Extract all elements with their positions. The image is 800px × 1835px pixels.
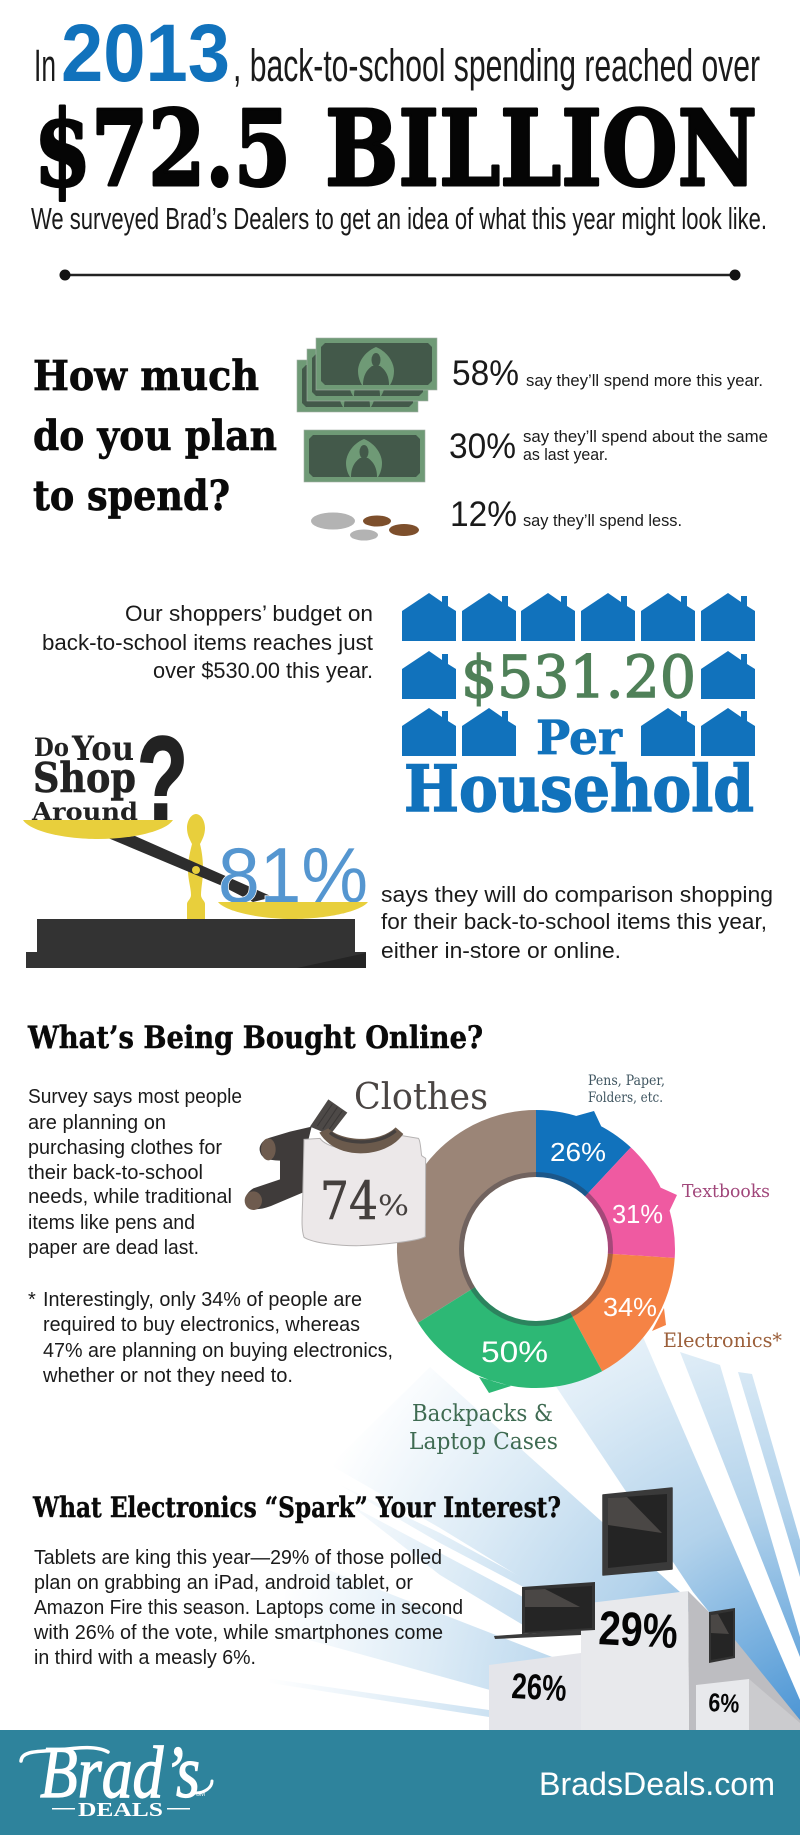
- stat: 6 percent: 6%: [708, 1687, 740, 1719]
- heading: do you shop around: Do: [34, 733, 69, 762]
- houses grid: [402, 593, 755, 756]
- survey paragraph: their back-to-school: [28, 1162, 203, 1184]
- stat: 81 percent: 81%: [218, 831, 368, 919]
- heading: how much do you plan to spend: do you plan: [33, 412, 277, 460]
- budget text: [42, 601, 373, 683]
- background light rays: [265, 1330, 800, 1725]
- stat: 30 percent: 30%: [449, 427, 516, 466]
- label: Per: Per: [536, 711, 623, 766]
- survey paragraph: needs, while traditional: [28, 1186, 232, 1208]
- heading: do you shop around: ?: [137, 712, 188, 846]
- stat: 58 percent: [452, 354, 763, 393]
- segment: pens paper folders: [536, 1110, 631, 1197]
- icon: coins: [311, 512, 419, 540]
- label: textbooks: Textbooks: [682, 1181, 770, 1202]
- electronics footnote: required to buy electronics, whereas: [43, 1314, 360, 1336]
- comparison shopping text: either in-store or online.: [381, 938, 621, 963]
- icon: stack of bills: [297, 338, 437, 412]
- heading: do you shop around: You: [71, 729, 134, 769]
- survey paragraph: [28, 1086, 242, 1259]
- headline: $72.5 BILLION: [34, 87, 757, 210]
- stat: 26 percent: 26%: [511, 1665, 568, 1709]
- footer band: [0, 1730, 800, 1835]
- electronics footnote: [28, 1289, 393, 1387]
- donut value 31%: 31%: [612, 1199, 663, 1229]
- electronics footnote: *: [28, 1289, 36, 1311]
- icon: laptop: [494, 1582, 595, 1639]
- stat: 58 percent: 58%: [452, 354, 519, 393]
- stat: 12 percent: say they’ll spend less.: [523, 511, 682, 530]
- icon: podium: [489, 1591, 800, 1730]
- stat: 74 percent: %: [378, 1189, 409, 1222]
- budget text: Our shoppers’ budget on: [125, 601, 373, 626]
- segment: textbooks: [584, 1147, 677, 1258]
- heading: do you shop around: [31, 712, 188, 846]
- segment: backpacks: [418, 1287, 602, 1393]
- stat: 30 percent: as last year.: [523, 445, 608, 464]
- label: backpacks and laptop cases: [409, 1401, 558, 1455]
- segment: clothes: [397, 1110, 536, 1323]
- service mark: SM: [196, 1792, 205, 1798]
- electronics paragraph: in third with a measly 6%.: [34, 1647, 256, 1669]
- electronics paragraph: Amazon Fire this season. Laptops come in second: [34, 1597, 463, 1619]
- electronics footnote: Interestingly, only 34% of people are: [43, 1289, 362, 1311]
- electronics paragraph: plan on grabbing an iPad, android tablet, or: [34, 1572, 413, 1594]
- survey paragraph: purchasing clothes for: [28, 1137, 222, 1159]
- icon: balance scale: [23, 814, 366, 968]
- heading: what's being bought online: What’s Being Bought Online?: [27, 1020, 483, 1056]
- heading: how much do you plan to spend: [33, 352, 277, 520]
- title line: In 2013: [34, 8, 760, 99]
- donut value 34%: 34%: [603, 1292, 657, 1322]
- label: backpacks and laptop cases: Backpacks &: [412, 1401, 553, 1427]
- icon: socks: [245, 1099, 347, 1210]
- budget text: back-to-school items reaches just: [42, 630, 373, 655]
- electronics paragraph: with 26% of the vote, while smartphones come: [33, 1622, 443, 1644]
- headline: $72.5 BILLION: $72.5: [34, 87, 291, 210]
- title line: In 2013: In: [34, 40, 56, 91]
- stat: 12 percent: [450, 495, 682, 534]
- electronics footnote: 47% are planning on buying electronics,: [43, 1340, 393, 1362]
- scale right pan: [218, 902, 368, 919]
- label: pens paper folders: [588, 1073, 665, 1106]
- donut chart: [397, 1110, 677, 1393]
- electronics paragraph: [33, 1547, 463, 1669]
- label: backpacks and laptop cases: Laptop Cases: [409, 1429, 558, 1455]
- icon: tablet: [603, 1488, 672, 1575]
- donut value 26%: 26%: [550, 1137, 606, 1167]
- stat: 74 percent: 74: [320, 1172, 378, 1232]
- icon: smartphone: [709, 1608, 735, 1663]
- website url: BradsDeals.com: [539, 1766, 775, 1802]
- heading: do you shop around: Around: [31, 797, 138, 826]
- comparison shopping text: [381, 882, 773, 963]
- label: pens paper folders: Pens, Paper,: [588, 1073, 665, 1089]
- survey paragraph: are planning on: [28, 1112, 166, 1134]
- heading: how much do you plan to spend: to spend?: [33, 472, 230, 520]
- survey paragraph: paper are dead last.: [28, 1237, 199, 1259]
- electronics footnote: whether or not they need to.: [42, 1365, 293, 1387]
- heading: how much do you plan to spend: How much: [33, 352, 259, 400]
- heading: do you shop around: Shop: [33, 754, 136, 802]
- budget text: over $530.00 this year.: [153, 658, 373, 683]
- label: Household: Household: [404, 752, 754, 827]
- segment: electronics: [570, 1254, 675, 1371]
- label: clothes: Clothes: [354, 1077, 488, 1118]
- year 2013: 2013: [61, 8, 230, 99]
- survey paragraph: items like pens and: [28, 1212, 195, 1234]
- stat: 12 percent: 12%: [450, 495, 517, 534]
- icon: shirt: [302, 1127, 426, 1246]
- logo word: deals: DEALS: [78, 1799, 163, 1821]
- comparison shopping text: says they will do comparison shopping: [381, 882, 773, 907]
- amount: $531.20: $531.20: [461, 643, 696, 711]
- heading: what electronics spark your interest: What Electronics “Spark” Your Interest?: [32, 1491, 561, 1524]
- comparison shopping text: for their back-to-school items this year,: [381, 909, 767, 934]
- stat: 30 percent: say they’ll spend about the same: [523, 427, 768, 446]
- label: pens paper folders: Folders, etc.: [588, 1090, 663, 1106]
- stat: 30 percent: [449, 427, 768, 466]
- stat: 58 percent: say they’ll spend more this year.: [526, 371, 763, 390]
- survey paragraph: Survey says most people: [28, 1086, 242, 1108]
- logo: Brad's Deals: [21, 1732, 212, 1821]
- logo script wordmark: Brad’s: [40, 1732, 200, 1814]
- label: electronics: Electronics*: [663, 1328, 782, 1352]
- donut value 50%: 50%: [481, 1336, 548, 1369]
- electronics paragraph: Tablets are king this year—29% of those polled: [34, 1547, 442, 1569]
- stat: 29 percent: 29%: [597, 1602, 679, 1659]
- icon: single bill: [304, 430, 425, 482]
